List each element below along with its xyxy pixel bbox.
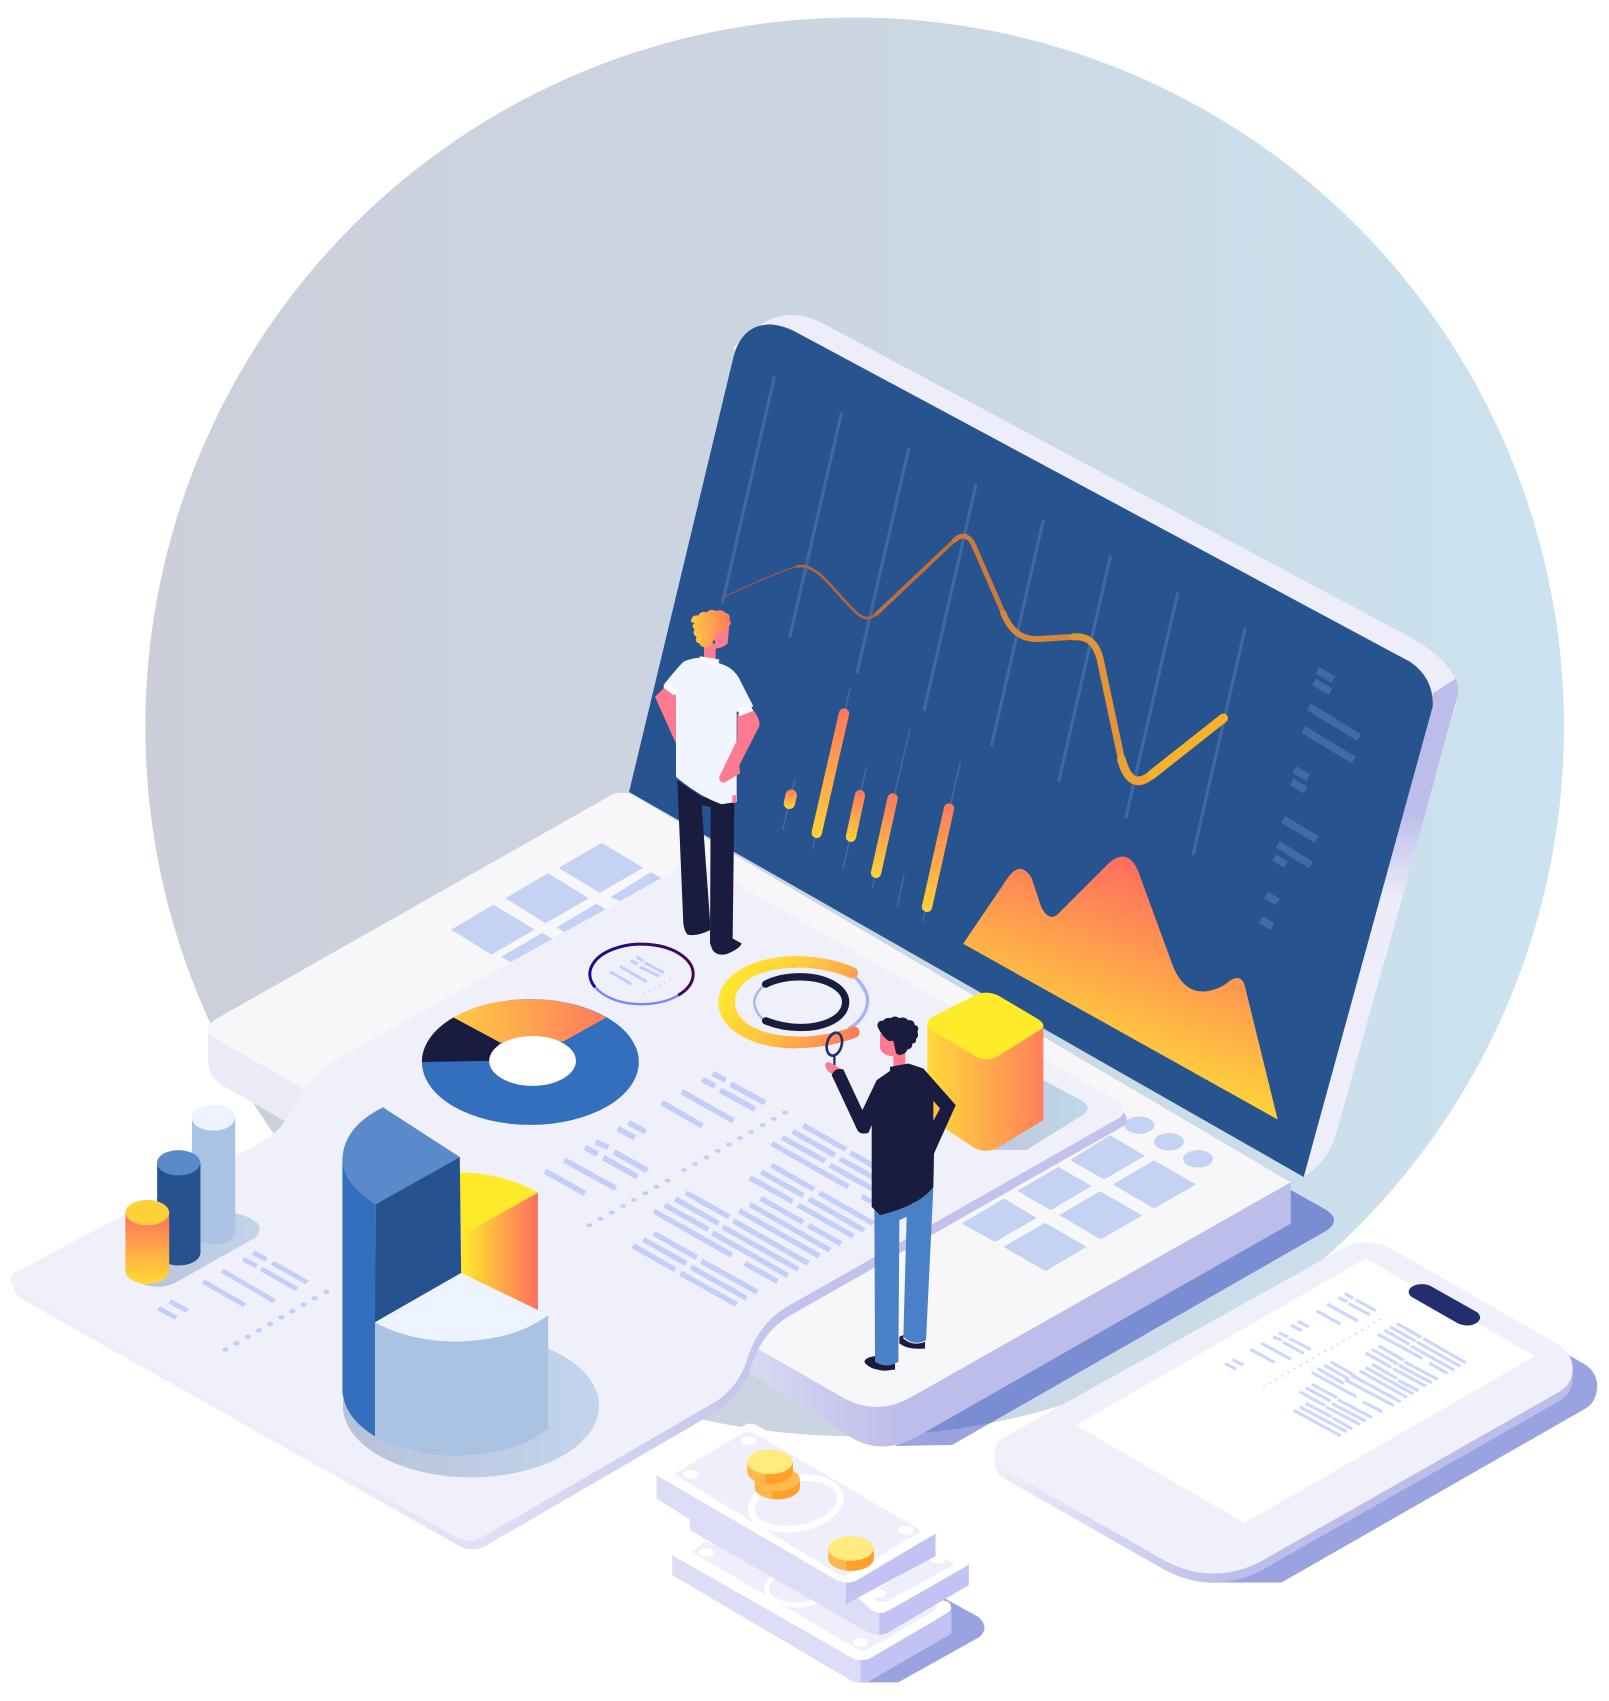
collar and cuffs <box>663 656 753 716</box>
small cylinder shadow <box>136 1213 260 1287</box>
candlestick bars <box>789 714 949 907</box>
3D pie shadow <box>343 1334 599 1477</box>
shirt <box>663 658 753 804</box>
line chart <box>725 536 1223 781</box>
screen side labels <box>1261 670 1359 927</box>
cube shadow <box>982 1080 1088 1150</box>
cube top <box>927 993 1043 1059</box>
sheet edge <box>14 871 1127 1550</box>
laptop <box>208 315 1458 1446</box>
data table text lines <box>545 1073 873 1304</box>
label lines <box>545 1073 765 1193</box>
left text lines <box>158 1253 307 1318</box>
person standing, white shirt <box>655 610 760 955</box>
orange cylinder <box>125 1200 169 1284</box>
small ring gauge <box>590 944 693 1004</box>
lid side highlight <box>1364 678 1458 960</box>
large ring gauge <box>718 956 868 1049</box>
tablet body <box>995 1242 1573 1573</box>
trousers <box>677 780 742 955</box>
pocket <box>732 795 736 803</box>
pale cylinder <box>192 1105 235 1244</box>
sheet surface <box>11 862 1124 1541</box>
3D pie light slice <box>375 1273 548 1456</box>
donut chart <box>422 999 639 1125</box>
money shadow <box>862 1598 984 1682</box>
3D pie blue column <box>342 1107 461 1436</box>
paper sheet <box>11 862 1127 1550</box>
coins <box>747 1449 874 1571</box>
money stack <box>657 1424 984 1683</box>
hand <box>825 1062 840 1075</box>
neck <box>893 1053 905 1067</box>
table rows <box>633 1125 873 1304</box>
screen grid lines <box>722 377 1245 922</box>
background circle <box>145 18 1564 1436</box>
3D pie yellow wedge <box>460 1172 538 1310</box>
face <box>880 1033 905 1056</box>
gap between arm and body <box>933 1101 940 1121</box>
tablet notch <box>1409 1284 1480 1326</box>
left arm <box>655 687 676 744</box>
left dotted divider <box>222 1289 329 1352</box>
laptop base front side <box>748 1182 1291 1446</box>
keyboard keys upper group <box>451 843 663 963</box>
magnifier <box>824 1031 844 1065</box>
area chart <box>963 856 1278 1119</box>
tablet edge <box>995 1252 1573 1583</box>
screen panel <box>629 324 1433 1177</box>
navy cylinder <box>157 1150 200 1265</box>
top banknote <box>657 1424 936 1605</box>
bottom banknote <box>672 1537 952 1683</box>
cylinders and 3D pie <box>125 1105 599 1477</box>
cube sides <box>927 1025 1043 1151</box>
keyboard keys lower group <box>962 1116 1213 1271</box>
right arm <box>719 711 760 783</box>
yellow cube <box>927 993 1088 1151</box>
jumper <box>832 1063 956 1215</box>
laptop drop shadow <box>895 1190 1334 1446</box>
tablet screen <box>1076 1259 1535 1523</box>
neck <box>704 644 716 660</box>
hair <box>691 610 731 647</box>
dotted divider <box>586 1110 788 1227</box>
hair <box>877 1017 918 1055</box>
laptop base left side <box>208 1025 542 1206</box>
laptop base top surface <box>208 793 1291 1407</box>
middle banknote <box>690 1518 969 1635</box>
tablet <box>995 1242 1597 1583</box>
face <box>715 624 729 649</box>
shoes <box>864 1335 925 1371</box>
jeans <box>874 1187 933 1366</box>
gauges <box>590 944 868 1049</box>
tablet shadow <box>1214 1355 1597 1582</box>
person with magnifier, dark jumper <box>824 1017 956 1371</box>
tablet text lines <box>1225 1294 1466 1436</box>
laptop lid <box>733 315 1457 1177</box>
